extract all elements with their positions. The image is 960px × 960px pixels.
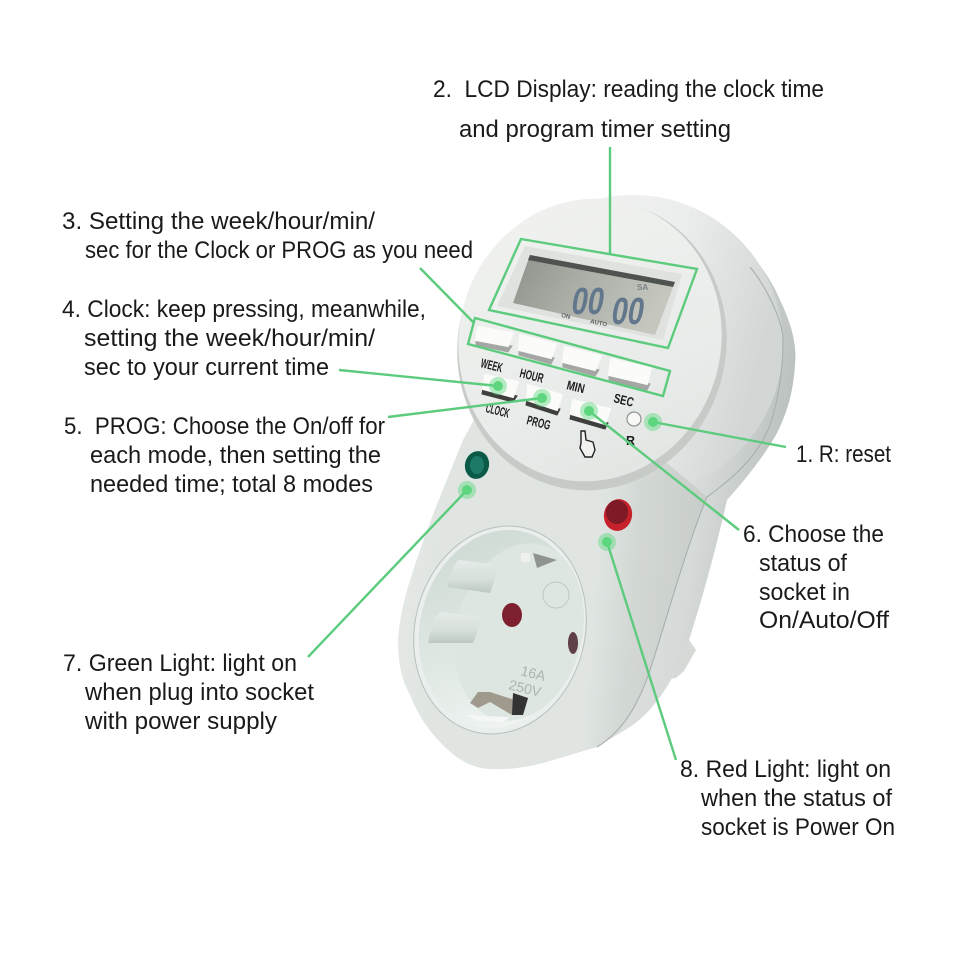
timer plug device [392,171,795,769]
callout: 5 prog: 5. PROG: Choose the On/off for [64,413,385,440]
ground symbol [543,582,569,608]
socket well [398,513,602,745]
callout: 4 clock: sec to your current time [84,354,329,381]
rotating dial [429,171,751,509]
button labels: CLOCK [484,400,511,421]
callout: 3 setting: 3. Setting the week/hour/min/ [62,208,375,235]
LCD bezel [497,246,682,340]
reset button [627,412,641,426]
rating text [507,662,548,700]
LCD digits: AUTO [590,319,608,329]
housing seam [597,267,783,747]
callout: 6 status: On/Auto/Off [759,607,889,634]
buttons [476,327,651,424]
cylinder collar [481,195,783,495]
callout: 7 green light: when plug into socket [84,679,314,706]
callout: 2 LCD display: and program timer setting [459,116,731,143]
callout: 7 green light: 7. Green Light: light on [63,650,297,677]
button labels [479,355,636,448]
callout: 5 prog: each mode, then setting the [90,442,381,469]
callout: 7 green light [63,481,476,735]
LCD top inner edge [528,255,675,287]
callout: 4 clock: 4. Clock: keep pressing, meanwhile, [62,296,426,323]
socket rim [392,508,608,752]
callout: 8 red light: socket is Power On [701,814,895,841]
rating text: 250V [507,676,544,700]
callout: 8 red light: when the status of [700,785,892,812]
bottom ground clip [465,692,528,722]
LCD digits: SA [637,283,648,292]
callout: 6 status [580,402,889,634]
callout: 3 setting [62,208,670,396]
callout: 6 status: 6. Choose the [743,521,884,548]
callout: 1 reset: 1. R: reset [796,441,891,468]
callout: 6 status: socket in [759,579,850,606]
callout: 5 prog [64,389,551,498]
socket holes [502,603,522,627]
button labels: R [626,433,636,448]
callout: 4 clock: setting the week/hour/min/ [84,325,375,352]
socket tabs [447,560,500,593]
button labels: WEEK [479,355,505,375]
button shadows [482,388,608,429]
top ground clip [521,553,557,568]
button labels: PROG [525,412,552,433]
callout: 4 clock [62,296,507,395]
LCD digits [561,280,648,333]
LCD digits: ON [561,313,571,321]
button labels: MIN [565,377,586,396]
plug pin [660,625,696,680]
callout: 8 red light [598,533,895,841]
socket floor [436,529,602,735]
callout: 7 green light: with power supply [84,708,277,735]
body front [398,405,707,769]
button labels: SEC [612,390,636,410]
red LED [601,496,635,534]
callout: 5 prog: needed time; total 8 modes [90,471,373,498]
LCD digits: 00 [608,290,648,333]
LCD digits: 00 [568,280,608,323]
callout: 2 LCD display: 2. LCD Display: reading the clock time [433,76,824,103]
callout: 8 red light: 8. Red Light: light on [680,756,891,783]
rating text: 16A [519,662,548,684]
LCD screen [513,255,675,335]
dial ring shadow [427,171,757,519]
callout: 2 LCD display [433,76,824,348]
green LED [462,449,492,481]
back housing [520,195,795,747]
callout: 3 setting: sec for the Clock or PROG as you need [85,237,473,264]
callout: 6 status: status of [759,550,847,577]
callout: 1 reset [644,413,891,468]
icon: hand [580,431,595,457]
button labels: HOUR [518,365,546,386]
